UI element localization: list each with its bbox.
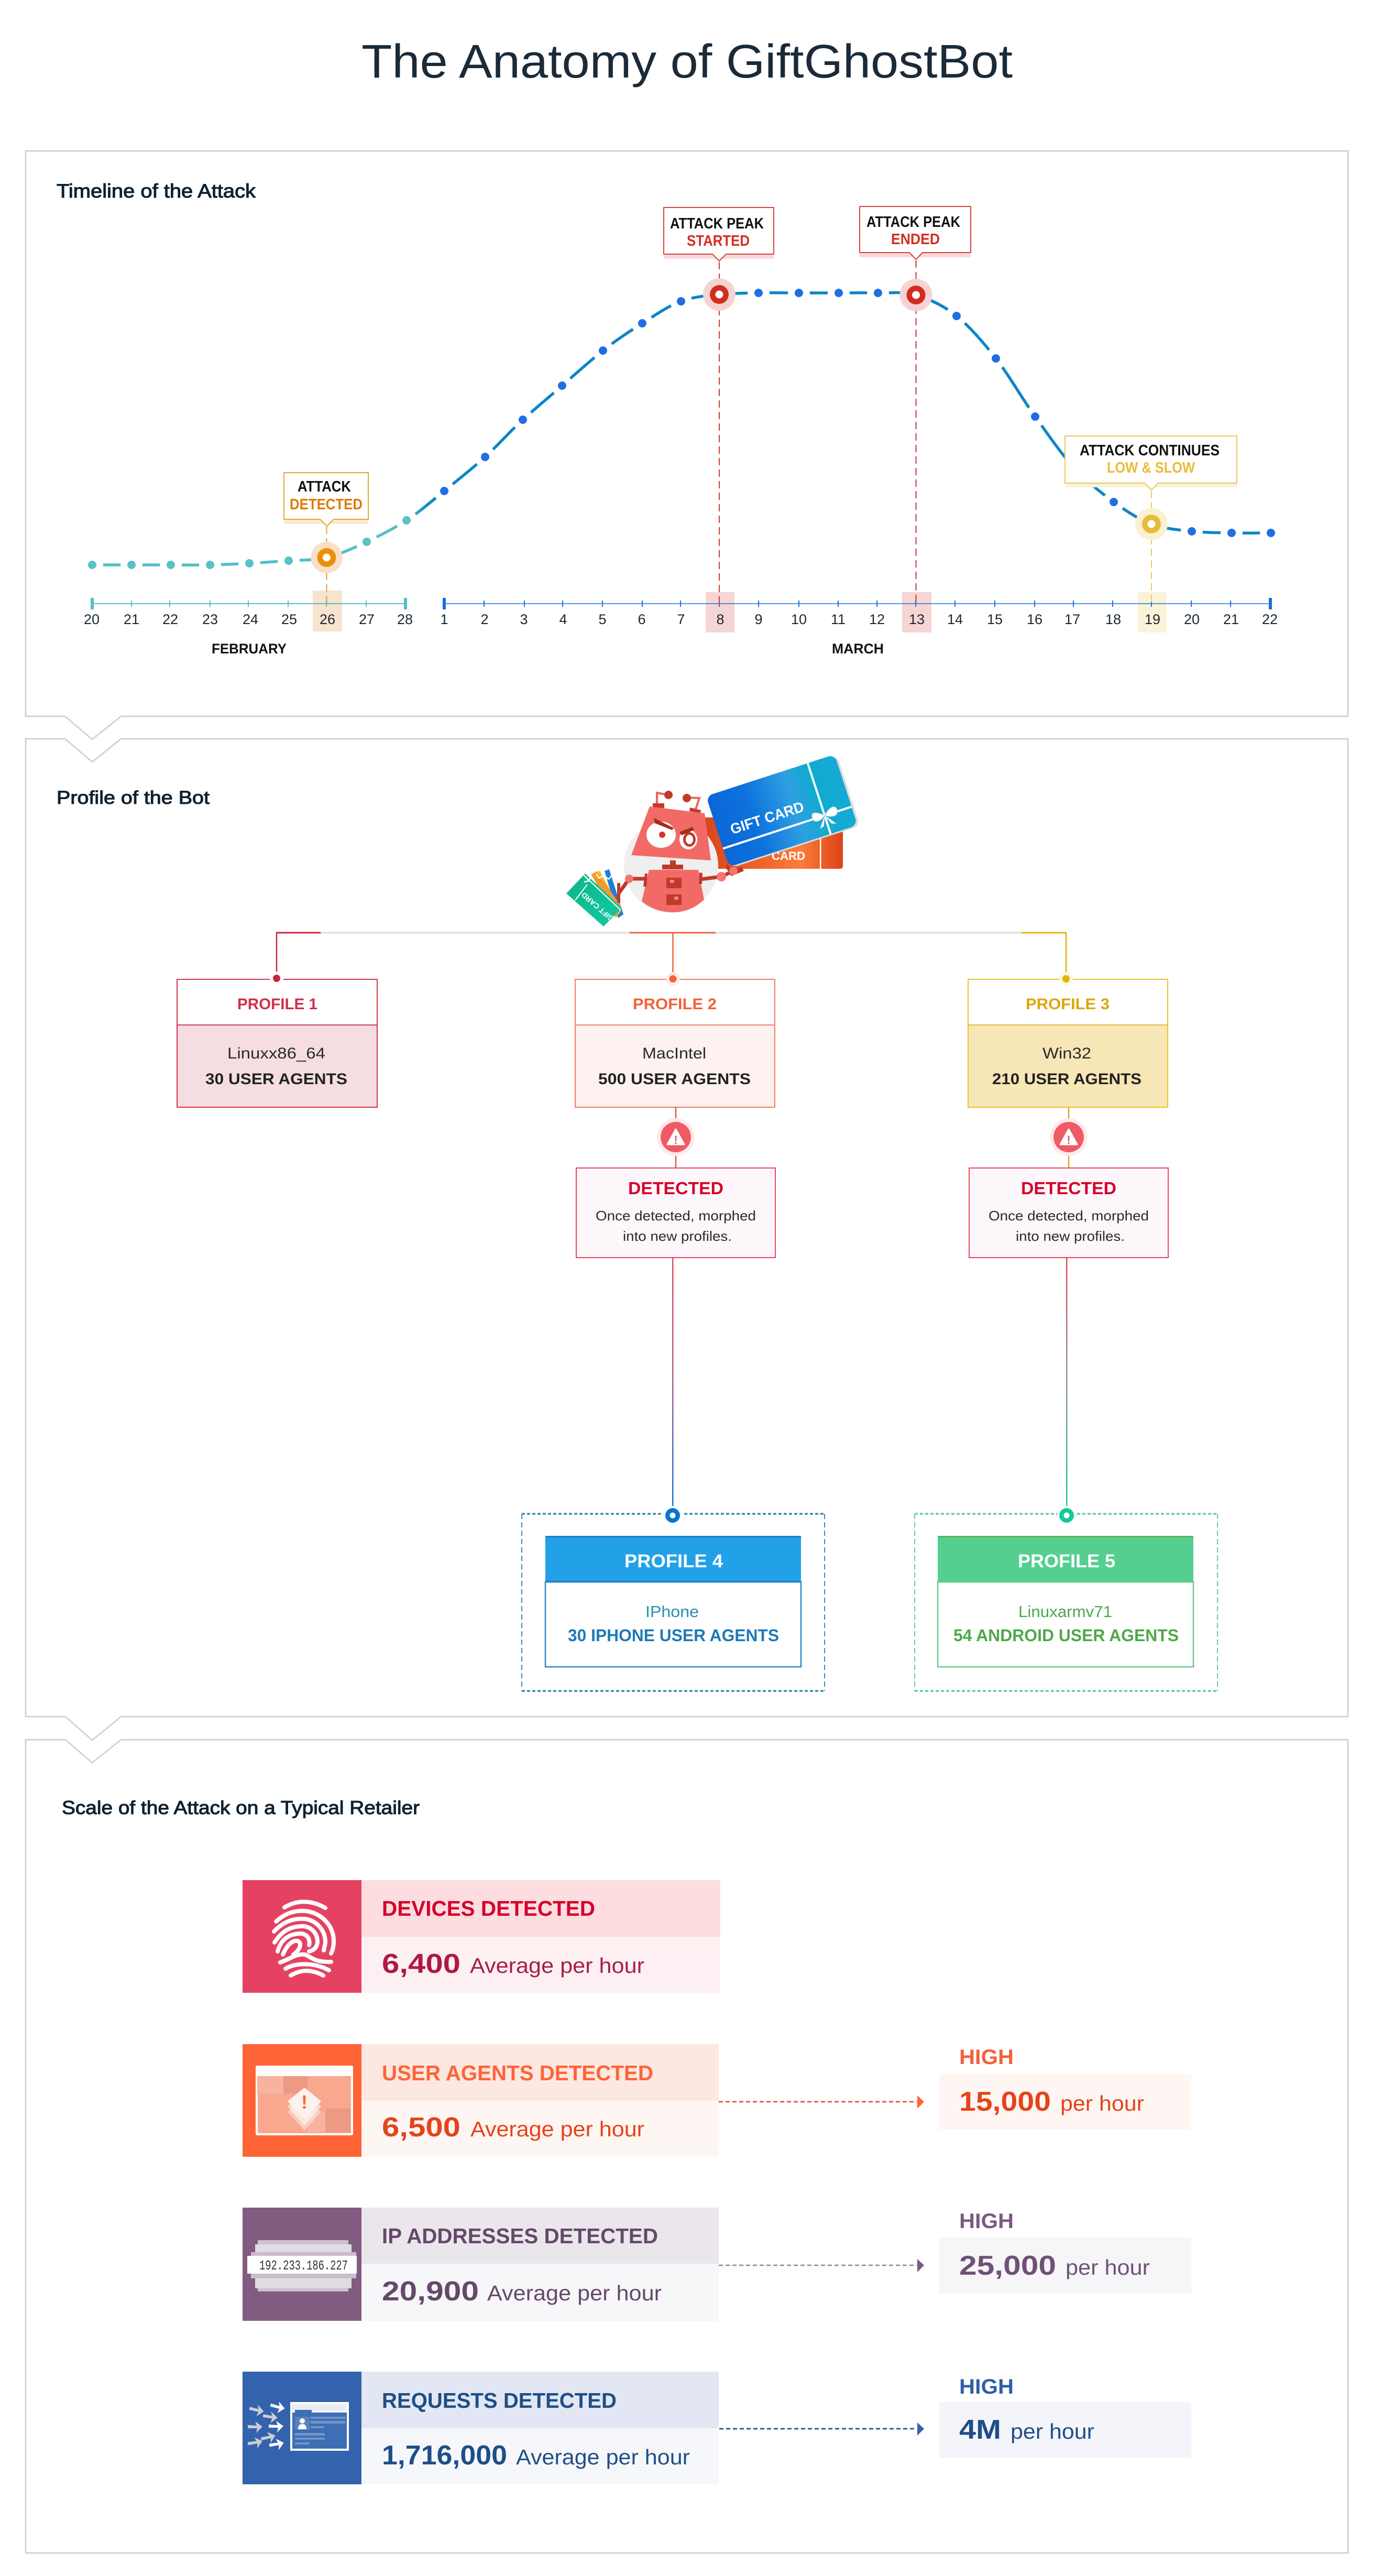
card: profile 3: 210 USER AGENTS [992, 1071, 1141, 1088]
small fan of gift cards [566, 869, 623, 926]
card: detected, profile 3: into new profiles. [1016, 1228, 1125, 1244]
axis day labels: 22 [1262, 612, 1278, 627]
card: detected, profile 3: DETECTED [1021, 1178, 1116, 1198]
axis day labels: 23 [202, 612, 218, 627]
card: profile 2: 500 USER AGENTS [598, 1071, 751, 1088]
callout: high user agents: 15,000 [959, 2087, 1051, 2117]
axis day labels: 5 [598, 612, 607, 627]
icon: detection warning, profile 3 [1050, 1107, 1088, 1168]
card: detected, profile 2: Once detected, morphed [596, 1208, 756, 1224]
date highlight bands [313, 591, 1167, 632]
axis day labels: 21 [124, 612, 139, 627]
group: profile 4 dashed frame [522, 1506, 825, 1691]
axis day labels: 11 [831, 612, 846, 627]
marker: low and slow [1135, 508, 1168, 540]
blue gift card: GIFT CARD [728, 799, 806, 837]
axis day labels: 26 [320, 612, 335, 627]
panel: timeline of the attack [26, 151, 1348, 739]
row: requests detected: Average per hour [516, 2445, 690, 2469]
axis day labels: 21 [1223, 612, 1239, 627]
month label: march: MARCH [832, 641, 884, 657]
callout: attack continues low and slow [1065, 436, 1237, 490]
connector: morph to profile 5 [1066, 1258, 1068, 1512]
callout: attack detected: ATTACK [298, 478, 351, 495]
marker: peak started [703, 278, 736, 311]
card: profile 1: PROFILE 1 [237, 996, 317, 1013]
axis day labels: 15 [987, 612, 1003, 627]
icon: detection warning, profile 2 [657, 1107, 695, 1168]
axis day labels: 12 [869, 612, 885, 627]
callout: high ip addresses [939, 2210, 1191, 2294]
callout: attack peak started [664, 208, 774, 261]
axis day labels: 22 [162, 612, 178, 627]
card: profile 2: MacIntel [642, 1045, 706, 1062]
row: devices detected [243, 1880, 720, 1993]
line chart: attack volume curve [81, 282, 1282, 576]
arrow: requests to high [719, 2422, 924, 2436]
illustration: robot holding gift cards [566, 754, 860, 926]
small fan of gift cards: GIFT CARD [580, 891, 616, 923]
panel: profile of the bot [26, 739, 1348, 1740]
marker: profile 5 node [1057, 1506, 1076, 1525]
card: detected, profile 2: into new profiles. [623, 1228, 732, 1244]
row: ip addresses detected: IP ADDRESSES DETECTED [382, 2224, 658, 2248]
callout: high ip addresses: per hour [1066, 2255, 1150, 2279]
card: detected, profile 3: Once detected, morphed [989, 1208, 1149, 1224]
orange gift card: CARD [772, 849, 805, 863]
card: profile 1: 30 USER AGENTS [205, 1071, 347, 1088]
callout: high requests: per hour [1011, 2419, 1094, 2443]
card: profile 2 [575, 972, 775, 1107]
marker: peak ended [900, 279, 932, 311]
data points: march [433, 282, 1282, 544]
callout: attack peak started: STARTED [687, 233, 750, 249]
callout: attack peak ended: ATTACK PEAK [866, 214, 960, 231]
axis day labels: 4 [559, 612, 567, 627]
callout: high requests [939, 2375, 1191, 2458]
axis day labels: 19 [1145, 612, 1160, 627]
panel: scale of the attack [26, 1740, 1348, 2553]
row: requests detected: 1,716,000 [382, 2440, 507, 2471]
axis day labels: 1 [440, 612, 448, 627]
arrow: user agents to high [719, 2095, 924, 2109]
axis day labels: 8 [716, 612, 725, 627]
callout: attack continues low and slow: LOW & SLOW [1107, 460, 1195, 476]
connector: horizontal branch [276, 933, 1067, 979]
group: profile 5 dashed frame [915, 1506, 1217, 1691]
data points: february [81, 509, 418, 576]
axis day labels: 24 [243, 612, 258, 627]
axis day labels: 14 [947, 612, 963, 627]
card: detected, profile 2 [576, 1168, 775, 1258]
callout: attack continues low and slow: ATTACK CONTINUES [1080, 442, 1220, 459]
row: user agents detected: 6,500 [382, 2112, 460, 2143]
axis day labels: 3 [520, 612, 528, 627]
callout: attack detected: DETECTED [290, 496, 363, 513]
card: profile 3: PROFILE 3 [1026, 996, 1110, 1013]
callout: high requests: 4M [959, 2415, 1001, 2445]
callout: attack peak ended [860, 206, 971, 259]
axis day labels: 2 [480, 612, 489, 627]
event guide lines [327, 260, 1151, 604]
row: devices detected: 6,400 [382, 1949, 460, 1979]
axis day labels: 17 [1064, 612, 1080, 627]
card: profile 4: PROFILE 4 [624, 1551, 723, 1571]
axis day labels: 18 [1105, 612, 1121, 627]
callout: high user agents: HIGH [959, 2046, 1014, 2069]
heading: scale of the attack: Scale of the Attack on a Typical Retailer [62, 1797, 420, 1818]
axis day labels: 9 [754, 612, 763, 627]
arrow: ip addresses to high [719, 2259, 924, 2272]
callout: high requests: HIGH [959, 2375, 1014, 2398]
row: user agents detected [243, 2044, 719, 2157]
row: devices detected: Average per hour [470, 1953, 644, 1978]
axis day labels: 20 [1184, 612, 1200, 627]
card: profile 4: IPhone [645, 1602, 699, 1621]
icon: detection warning, profile 2: ! [674, 1133, 678, 1147]
callout: high ip addresses: 25,000 [959, 2251, 1056, 2281]
axis day labels: 13 [909, 612, 925, 627]
card: profile 5: Linuxarmv71 [1018, 1602, 1112, 1621]
row: ip addresses detected: Average per hour [487, 2281, 662, 2305]
icon: detection warning, profile 3: ! [1067, 1133, 1071, 1147]
axis day labels: 28 [397, 612, 413, 627]
heading: timeline: Timeline of the Attack [57, 180, 256, 202]
heading: profile of the bot: Profile of the Bot [57, 788, 210, 808]
axis day labels: 10 [791, 612, 807, 627]
month label: february: FEBRUARY [212, 641, 287, 657]
axis day labels: 25 [281, 612, 297, 627]
blue gift card [706, 754, 860, 868]
card: profile 5 [938, 1536, 1193, 1667]
card: profile 1: Linuxx86_64 [227, 1045, 325, 1062]
row: ip addresses detected: 20,900 [382, 2276, 479, 2307]
axis day labels: 20 [84, 612, 100, 627]
card: profile 3 [968, 972, 1168, 1107]
callout: high ip addresses: HIGH [959, 2210, 1014, 2233]
icon: fingerprint [274, 1902, 334, 1975]
card: profile 4: 30 IPHONE USER AGENTS [568, 1626, 779, 1645]
row: user agents detected: Average per hour [470, 2117, 644, 2141]
card: profile 5: PROFILE 5 [1018, 1551, 1115, 1571]
axis day labels: 27 [359, 612, 375, 627]
icon: browser alert [256, 2066, 353, 2135]
row: requests detected [243, 2372, 719, 2484]
card: profile 5: 54 ANDROID USER AGENTS [953, 1626, 1179, 1645]
row: devices detected: DEVICES DETECTED [382, 1896, 595, 1920]
callout: attack peak ended: ENDED [891, 231, 940, 248]
marker: profile 4 node [663, 1506, 682, 1525]
callout: high user agents: per hour [1060, 2091, 1144, 2115]
card: detected, profile 3 [969, 1168, 1168, 1258]
row: user agents detected: USER AGENTS DETECTED [382, 2061, 653, 2085]
callout: attack peak started: ATTACK PEAK [670, 215, 764, 232]
card: detected, profile 2: DETECTED [628, 1178, 723, 1198]
axis day labels: 16 [1027, 612, 1042, 627]
card: profile 4 [545, 1536, 801, 1667]
axis day labels: 7 [677, 612, 685, 627]
icon: ip address stack: 192.233.186.227 [259, 2258, 348, 2274]
icon: request flood [247, 2400, 349, 2451]
callout: attack detected [284, 473, 368, 526]
callout: high user agents [939, 2046, 1191, 2129]
row: requests detected: REQUESTS DETECTED [382, 2388, 617, 2413]
card: profile 1 [177, 972, 377, 1107]
robot body [619, 791, 744, 913]
axis: february [91, 598, 407, 609]
axis day labels [84, 612, 1278, 627]
marker: attack detected [311, 542, 343, 573]
icon: browser alert: ! [301, 2091, 308, 2113]
orange gift card [702, 817, 843, 869]
axis: march [443, 598, 1272, 609]
card: profile 3: Win32 [1042, 1045, 1091, 1062]
icon: ip address stack [247, 2240, 357, 2291]
connector: morph to profile 4 [672, 1258, 674, 1512]
title: The Anatomy of GiftGhostBot [361, 36, 1013, 88]
axis day labels: 6 [638, 612, 646, 627]
row: ip addresses detected [243, 2208, 719, 2321]
card: profile 2: PROFILE 2 [633, 996, 717, 1013]
